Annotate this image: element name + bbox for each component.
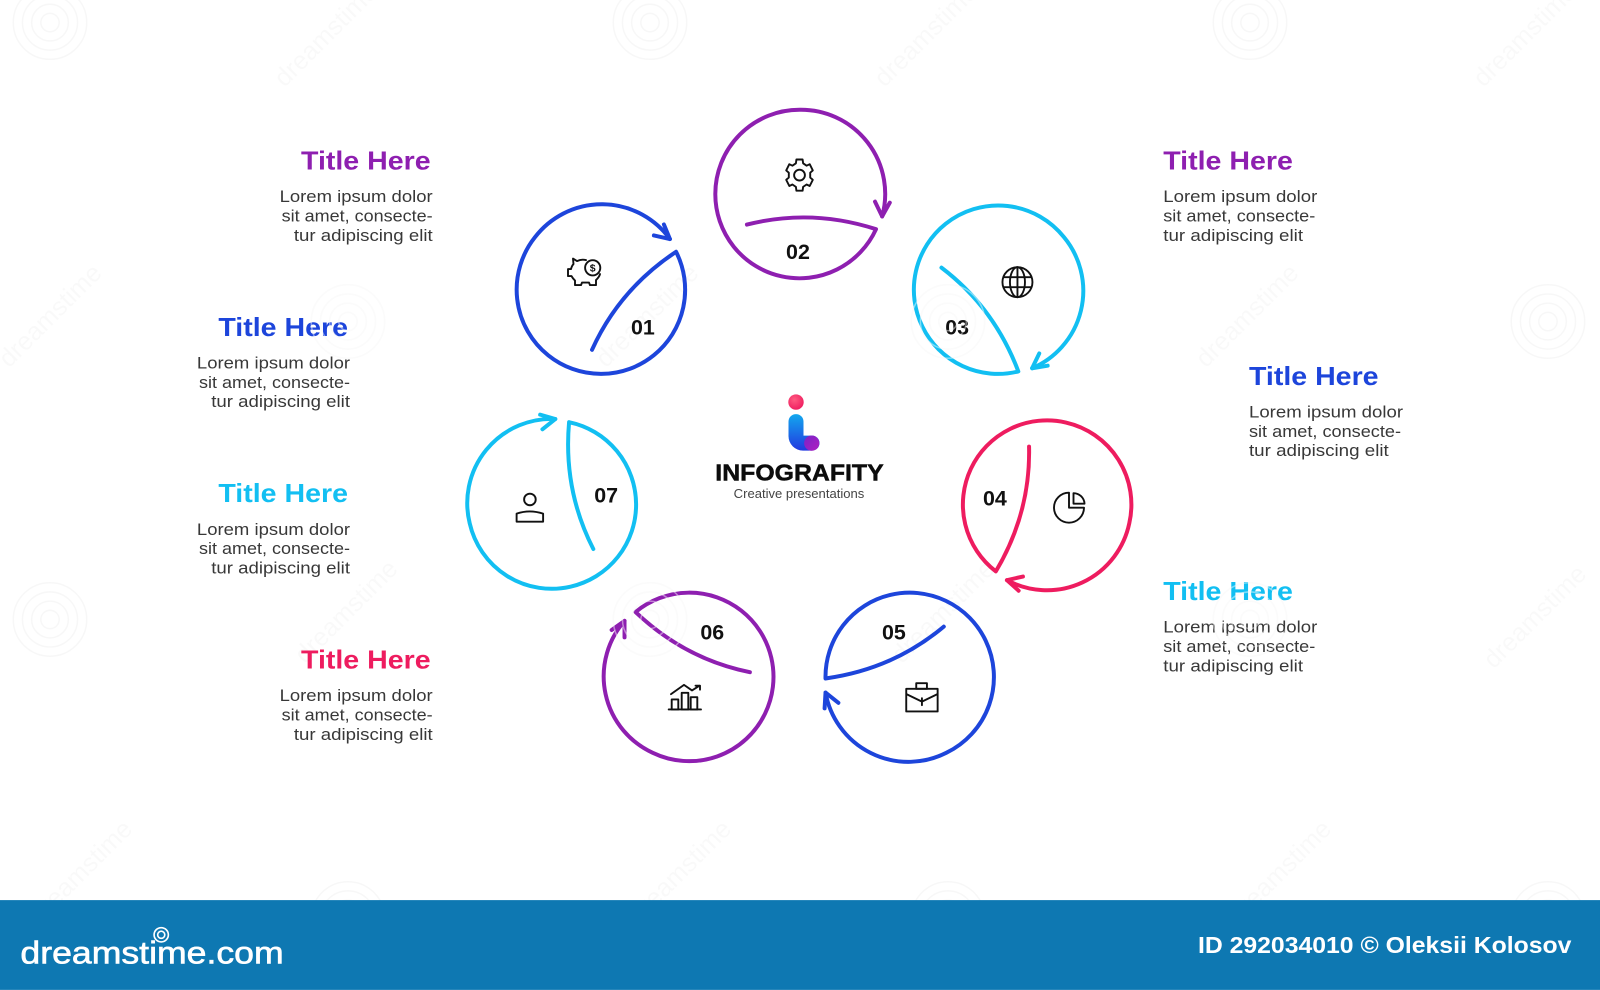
body: tur adipiscing elit	[211, 392, 350, 411]
icon: person	[517, 494, 543, 522]
panel: step 02	[715, 110, 890, 278]
icon: piggy bank: $	[590, 263, 596, 275]
text block: top left purple	[280, 145, 433, 245]
panel: step 03	[880, 171, 1120, 413]
heading: Title Here	[218, 312, 348, 342]
image credit: ID 292034010 © Oleksii Kolosov	[1198, 932, 1572, 958]
body: tur adipiscing elit	[294, 725, 433, 744]
icon: briefcase	[906, 683, 938, 711]
body: sit amet, consecte-	[1163, 637, 1315, 656]
brand name: INFOGRAFITY	[715, 460, 884, 486]
body	[1249, 402, 1403, 460]
dreamstime logo: dreamstime.com	[20, 934, 284, 970]
text block: middle right blue	[1249, 361, 1403, 460]
body	[280, 686, 433, 744]
body: Lorem ipsum dolor	[1163, 618, 1318, 637]
body: Lorem ipsum dolor	[197, 520, 350, 539]
heading: Title Here	[301, 644, 431, 674]
icon: infografity mark	[788, 394, 820, 451]
ring with arrow 06	[571, 562, 802, 789]
text: dreamstime	[1190, 259, 1304, 373]
text: dreamstime	[24, 815, 138, 929]
body	[1163, 187, 1318, 245]
central logo	[715, 394, 884, 501]
icon: pie chart	[1054, 493, 1084, 523]
body: Lorem ipsum dolor	[197, 353, 350, 372]
panel: step 05	[792, 564, 1022, 792]
text block: bottom right cyan	[1163, 576, 1318, 676]
body: Lorem ipsum dolor	[280, 686, 433, 705]
number 02: 02	[786, 240, 810, 264]
icon: gear	[786, 160, 813, 191]
footer bar	[0, 900, 1600, 990]
text: dreamstime	[289, 555, 403, 669]
panel: step 06	[571, 562, 802, 789]
panel: step 04	[945, 404, 1148, 611]
heading: Title Here	[1163, 145, 1293, 175]
panel: step 07	[450, 398, 653, 605]
text block: upper left blue	[197, 312, 350, 411]
ring with arrow 01	[483, 167, 723, 408]
body	[197, 520, 350, 578]
body: sit amet, consecte-	[1249, 422, 1401, 441]
body: tur adipiscing elit	[1163, 657, 1303, 676]
ring with arrow 04	[945, 404, 1148, 611]
body: Lorem ipsum dolor	[280, 187, 433, 206]
number 03: 03	[945, 315, 969, 339]
ring with arrow 03	[880, 171, 1120, 413]
text: dreamstime	[1223, 815, 1337, 929]
text block: top right purple	[1163, 145, 1318, 245]
panel: step 01	[483, 167, 723, 408]
tagline: Creative presentations	[734, 486, 864, 501]
body	[1163, 618, 1318, 676]
heading: Title Here	[218, 478, 348, 508]
body: Lorem ipsum dolor	[1249, 402, 1403, 421]
body: tur adipiscing elit	[1163, 226, 1303, 245]
icon: globe	[1002, 267, 1032, 297]
body: sit amet, consecte-	[282, 207, 433, 226]
body: sit amet, consecte-	[199, 539, 350, 558]
body: tur adipiscing elit	[294, 226, 433, 245]
body: sit amet, consecte-	[199, 373, 350, 392]
text: dreamstime	[886, 555, 1000, 669]
number 01: 01	[631, 315, 655, 339]
ring with arrow 07	[450, 398, 653, 605]
heading: Title Here	[1163, 576, 1293, 606]
body: sit amet, consecte-	[1163, 207, 1315, 226]
heading: Title Here	[301, 145, 431, 175]
body: tur adipiscing elit	[211, 559, 350, 578]
number 04: 04	[983, 487, 1007, 511]
text: dreamstime	[623, 815, 737, 929]
body: Lorem ipsum dolor	[1163, 187, 1318, 206]
text: dreamstime	[1478, 560, 1592, 674]
ring with arrow 02	[715, 110, 890, 278]
icon: piggy bank	[568, 259, 600, 285]
body	[280, 187, 433, 245]
number 07: 07	[594, 484, 618, 508]
body: sit amet, consecte-	[282, 706, 433, 725]
icon: growth chart	[669, 685, 701, 709]
number 06: 06	[700, 620, 724, 644]
heading: Title Here	[1249, 361, 1379, 391]
text block: lower left cyan	[197, 478, 350, 578]
number 05: 05	[882, 620, 906, 644]
ring with arrow 05	[792, 564, 1022, 792]
text block: bottom left pink	[280, 644, 433, 744]
body: tur adipiscing elit	[1249, 441, 1389, 460]
body	[197, 353, 350, 411]
text: dreamstime	[590, 259, 704, 373]
